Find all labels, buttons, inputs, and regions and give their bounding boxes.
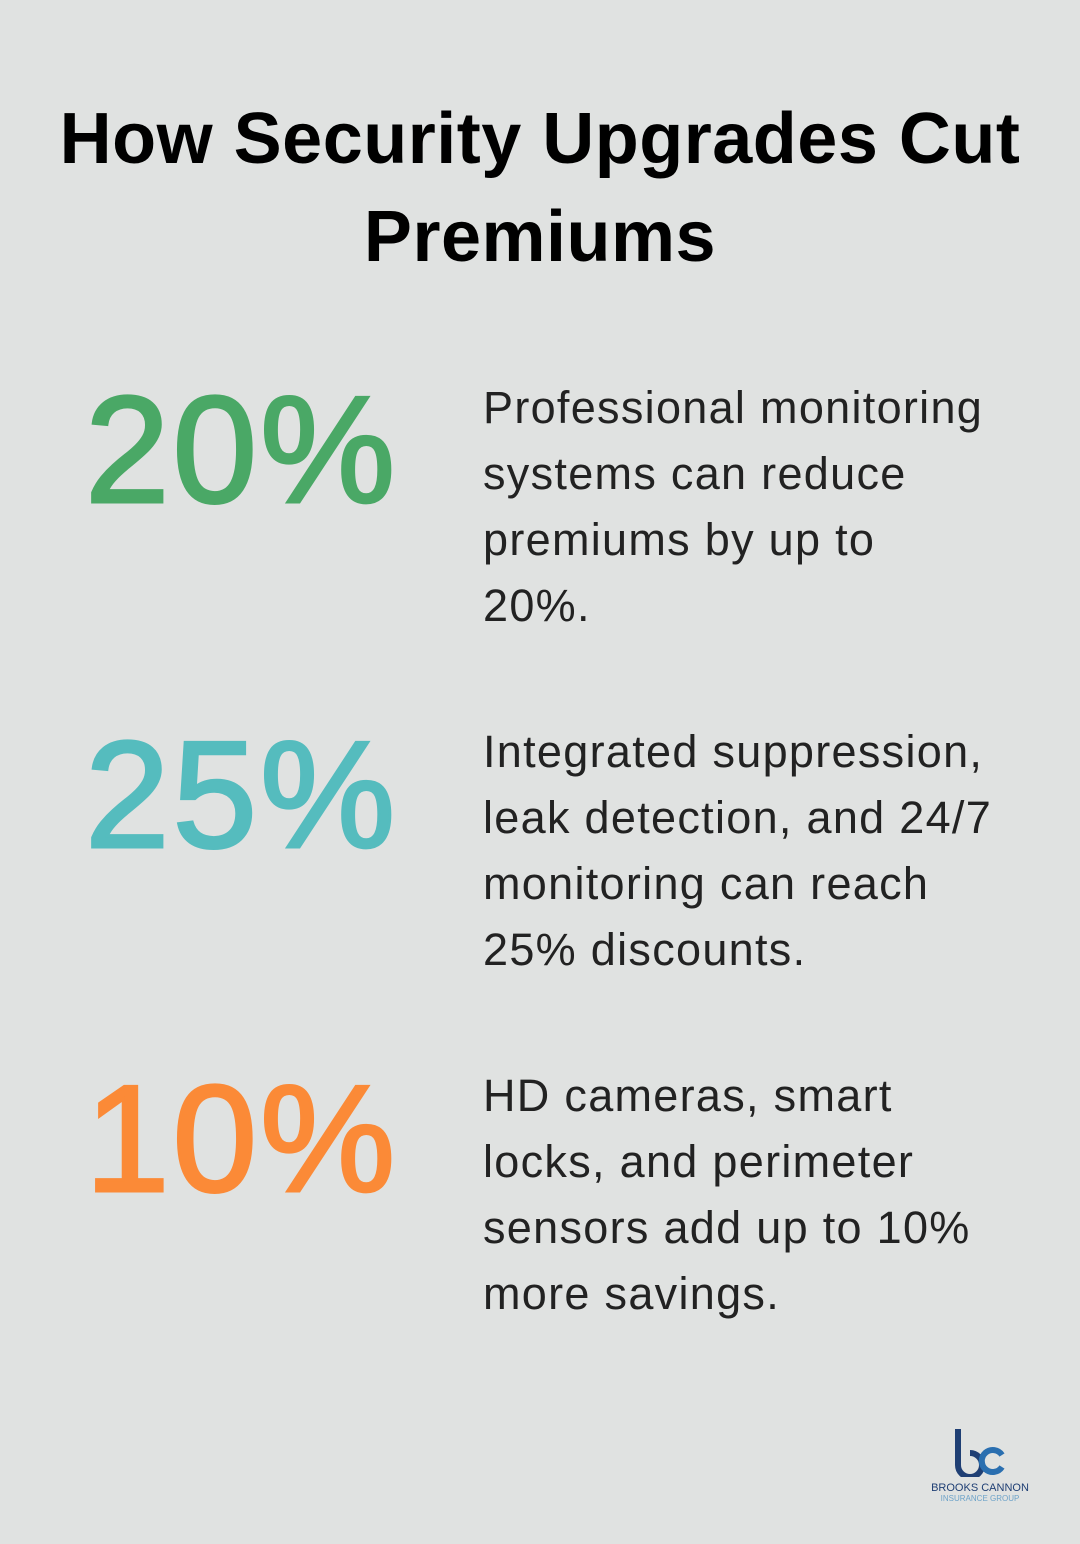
stat 1 text: 20%. (483, 580, 591, 631)
stat 3 number: 10% (85, 1054, 398, 1224)
logo: INSURANCE GROUP (941, 1494, 1019, 1503)
stat 3 text: sensors add up to 10% (483, 1202, 971, 1253)
stat 2 text: Integrated suppression, (483, 726, 983, 777)
stat 1 text: systems can reduce (483, 448, 907, 499)
stat 2 text (483, 726, 992, 975)
stat 1 text (483, 382, 983, 631)
title: How Security Upgrades Cut (60, 99, 1020, 179)
stat 3 text: locks, and perimeter (483, 1136, 914, 1187)
stat 2 text: monitoring can reach (483, 858, 929, 909)
stat 3 text: HD cameras, smart (483, 1070, 893, 1121)
title: Premiums (364, 197, 716, 277)
title (60, 99, 1020, 277)
stat 3 text: more savings. (483, 1268, 780, 1319)
logo: BROOKS CANNON (931, 1482, 1029, 1494)
stat 2 text: leak detection, and 24/7 (483, 792, 992, 843)
stat 3 text (483, 1070, 971, 1319)
stat 2 number: 25% (85, 710, 398, 880)
logo (931, 1429, 1029, 1503)
stat 1 number: 20% (85, 365, 398, 535)
stat 1 text: premiums by up to (483, 514, 875, 565)
stat 1 text: Professional monitoring (483, 382, 983, 433)
stat 2 text: 25% discounts. (483, 924, 806, 975)
